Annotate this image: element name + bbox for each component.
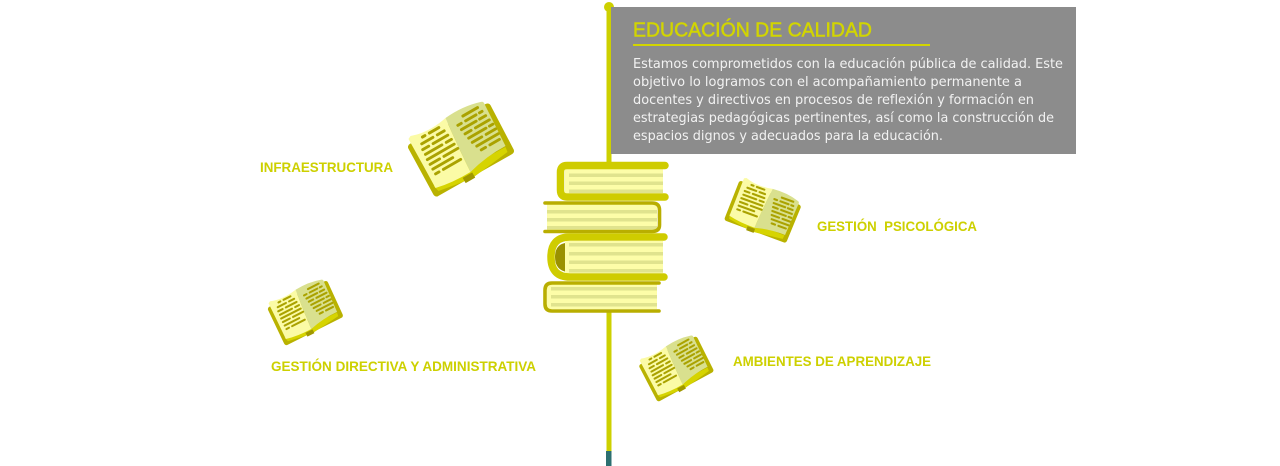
book 1 [560, 166, 665, 197]
label: gestión directiva y administrativa: GESTIÓN DIRECTIVA Y ADMINISTRATIVA [271, 357, 536, 374]
icon: open book gestión psicológica [714, 161, 812, 259]
panel: educación de calidad [611, 7, 1076, 154]
icon: open book infraestructura [408, 102, 510, 193]
book 2 [545, 203, 660, 232]
vertical pole [604, 2, 614, 466]
book 3 [551, 237, 664, 277]
label: infraestructura: INFRAESTRUCTURA [260, 159, 393, 175]
panel body text: objetivo lo logramos con el acompañamiento permanente a [633, 75, 1022, 90]
book 4 [545, 283, 659, 311]
icon: stack of books [545, 166, 665, 311]
icon: open book gestión directiva [267, 277, 342, 345]
panel body text: espacios dignos y adecuados para la educación. [633, 128, 943, 144]
icon: open book ambientes de aprendizaje [639, 335, 712, 400]
panel title: EDUCACIÓN DE CALIDAD [633, 18, 872, 42]
panel body text: estrategias pedagógicas pertinentes, así como la construcción de [633, 110, 1054, 126]
panel body text: Estamos comprometidos con la educación pública de calidad. Este [633, 56, 1063, 72]
panel body text: docentes y directivos en procesos de reflexión y formación en [633, 92, 1034, 108]
label: ambientes de aprendizaje: AMBIENTES DE APRENDIZAJE [733, 353, 931, 369]
panel body text [633, 56, 1063, 144]
label: gestión psicológica: GESTIÓN PSICOLÓGICA [817, 217, 977, 234]
